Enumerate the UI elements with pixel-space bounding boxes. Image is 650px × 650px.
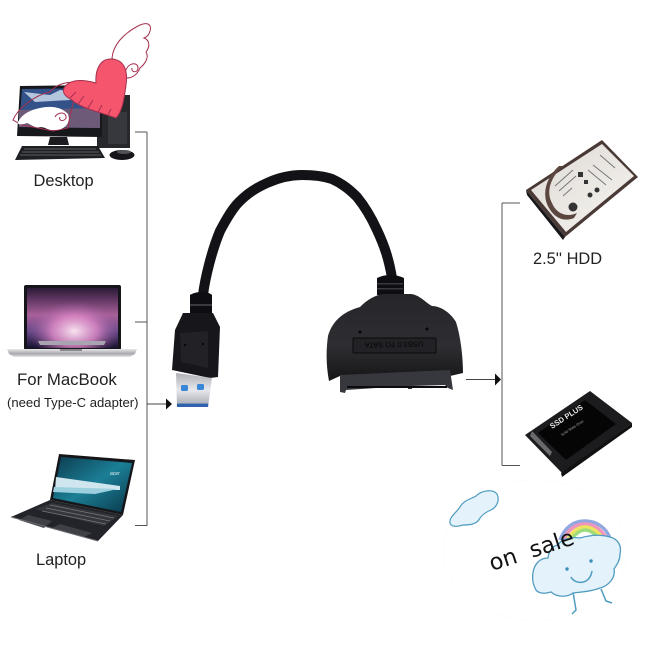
- icon: Acer laptop: acer: [110, 471, 120, 477]
- bracket: left connector lines: [135, 132, 147, 526]
- icon: winged heart: [13, 24, 150, 131]
- bracket: right connector lines: [502, 203, 520, 466]
- label: Laptop: Laptop: [36, 551, 86, 569]
- SATA connector housing: USB3.0 TO SATA: [365, 339, 423, 350]
- panel: drives: [525, 140, 638, 477]
- arrow: computers to USB plug: [147, 398, 172, 410]
- SATA connector housing: [327, 275, 463, 393]
- label: Desktop: Desktop: [34, 172, 94, 190]
- panel: host computers: [7, 24, 150, 569]
- icon: desktop computer: [15, 85, 134, 160]
- label: 2.5 inch HDD: 2.5'' HDD: [533, 250, 602, 268]
- icon: rainbow: [560, 521, 610, 543]
- icon: MacBook: [7, 285, 137, 357]
- icon: SSD drive: Solid State Drive: [560, 419, 584, 437]
- icon: SSD drive: [525, 391, 632, 477]
- arrow: adapter to drives: [466, 374, 501, 386]
- panel: USB to SATA adapter cable: [172, 175, 463, 407]
- icon: Acer laptop: [11, 454, 135, 541]
- icon: 2.5 inch hard drive: [526, 140, 638, 240]
- USB plug: [172, 292, 220, 407]
- panel: on sale sticker: [443, 480, 627, 620]
- icon: small cloud: [450, 491, 498, 526]
- icon: smiling rainbow cloud: [533, 535, 621, 614]
- label: For MacBook: For MacBook: [17, 370, 117, 389]
- label: need Type-C adapter: (need Type-C adapter): [7, 395, 138, 410]
- cable: [203, 175, 392, 295]
- icon: SSD drive: SSD PLUS: [548, 403, 585, 431]
- label: on sale: on sale: [486, 525, 577, 577]
